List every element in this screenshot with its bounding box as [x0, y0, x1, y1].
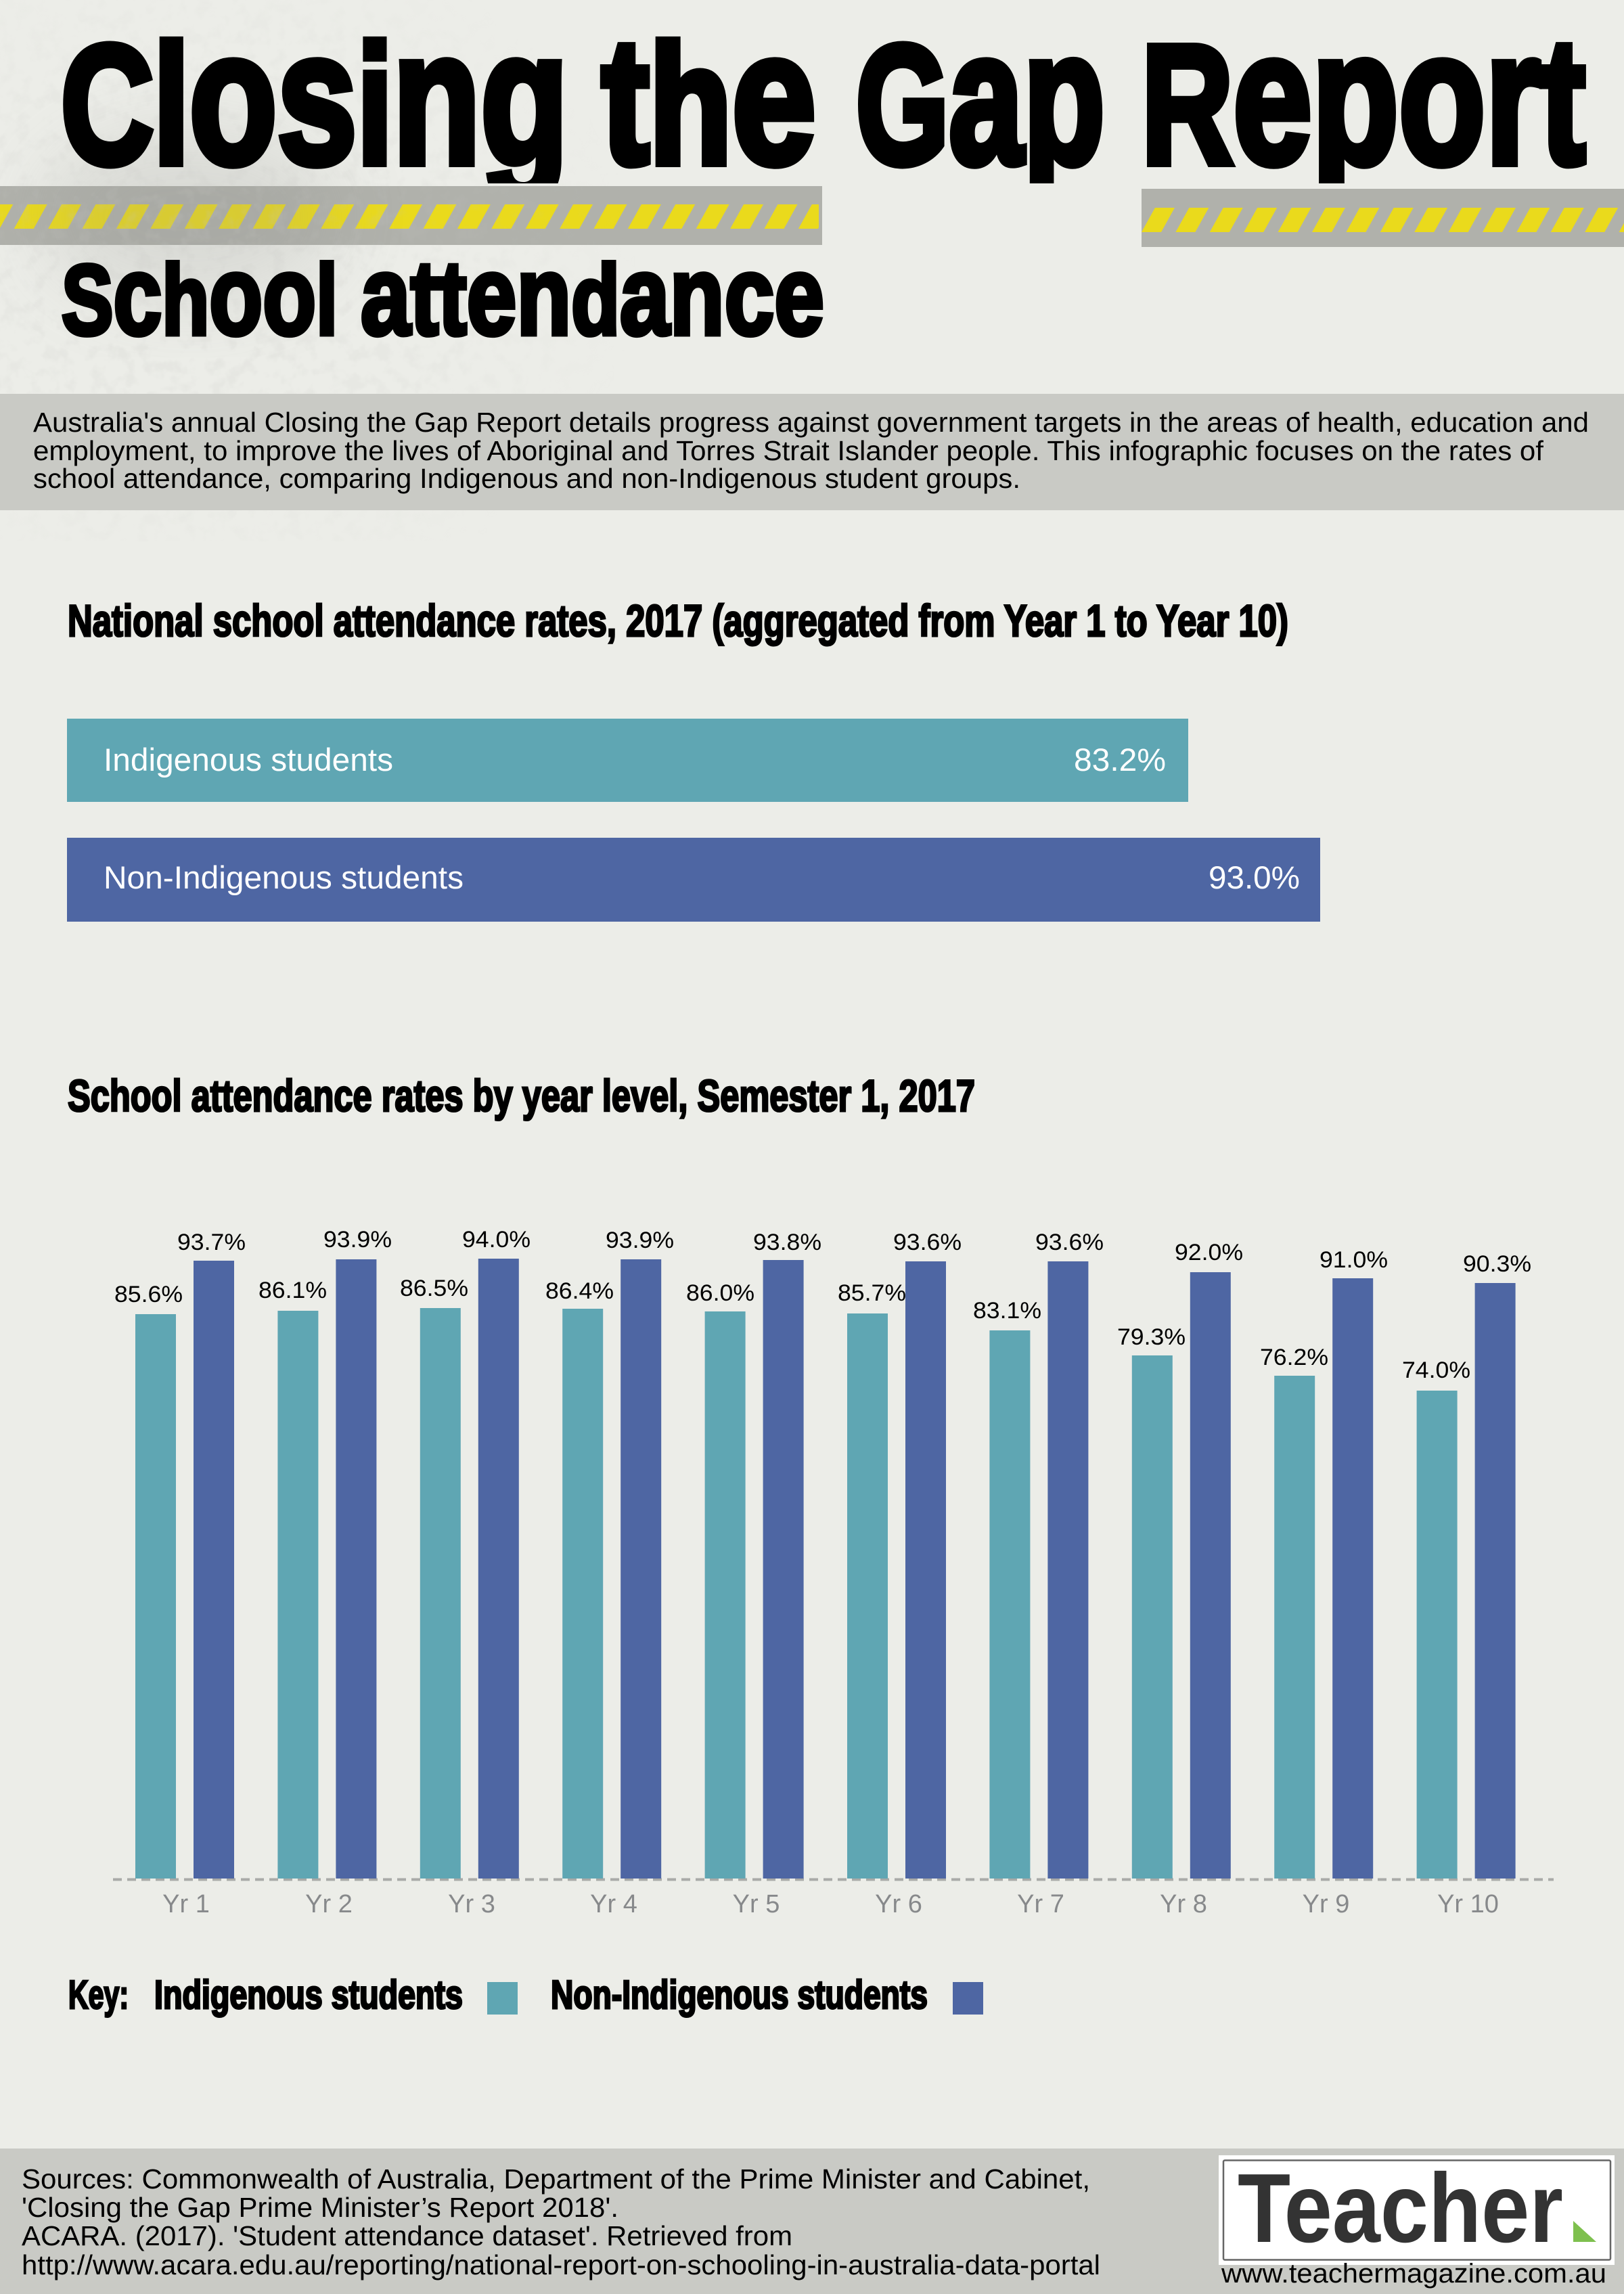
Yr 4 bars: 86.4% — [545, 1278, 614, 1304]
hazard tape band right — [1142, 189, 1624, 247]
Yr 1 bars: 93.7% — [177, 1230, 246, 1255]
Yr 1 bars: 85.6% — [114, 1282, 183, 1307]
Yr 10 bars: Yr 10 — [1437, 1890, 1499, 1918]
Yr 7 bars: Yr 7 — [1017, 1890, 1064, 1918]
sources text: Sources: Commonwealth of Australia, Department of the Prime Minister and Cabinet, — [22, 2163, 1090, 2195]
website url: www.teachermagazine.com.au — [1221, 2259, 1606, 2289]
sources text: 'Closing the Gap Prime Minister’s Report 2018'. — [22, 2192, 618, 2223]
panel: introduction: Australia's annual Closing the Gap Report details progress against government targets in the areas of health, education and — [33, 407, 1589, 438]
Yr 9 bars: 76.2% — [1260, 1345, 1328, 1370]
panel: introduction — [0, 394, 1624, 510]
logo: Teacher: Teacher — [1238, 2153, 1563, 2263]
Yr 1 bars — [114, 1230, 246, 1918]
hazard tape band left — [0, 186, 822, 245]
Yr 7 bars — [973, 1230, 1104, 1918]
legend — [68, 1973, 983, 2017]
heading: national attendance rates: National school attendance rates, 2017 (aggregated from Year 1 to Year 10) — [68, 595, 1288, 646]
Yr 4 bars: Yr 4 — [590, 1890, 637, 1918]
subtitle: attendance — [361, 233, 824, 359]
sources text: ACARA. (2017). 'Student attendance dataset'. Retrieved from — [22, 2220, 792, 2251]
Yr 3 bars: 94.0% — [462, 1227, 531, 1253]
panel: national rates bar chart — [67, 719, 1320, 922]
Yr 10 bars: 74.0% — [1402, 1357, 1470, 1383]
grunge texture top left — [0, 106, 540, 348]
panel: introduction: school attendance, comparing Indigenous and non-Indigenous student groups. — [33, 463, 1020, 494]
Yr 2 bars: 93.9% — [323, 1227, 392, 1253]
Yr 5 bars: 86.0% — [686, 1280, 754, 1306]
subtitle — [62, 233, 824, 359]
panel: introduction: employment, to improve the lives of Aboriginal and Torres Strait Islander people. This infographic focuses on the rates of — [33, 435, 1544, 466]
Yr 6 bars: 93.6% — [893, 1230, 962, 1255]
Yr 9 bars: Yr 9 — [1303, 1890, 1349, 1918]
Yr 7 bars: 83.1% — [973, 1298, 1041, 1324]
Yr 8 bars: 79.3% — [1117, 1324, 1186, 1350]
Yr 5 bars — [686, 1230, 821, 1918]
sources text — [22, 2163, 1100, 2280]
sources text: http://www.acara.edu.au/reporting/national-report-on-schooling-in-australia-data-portal — [22, 2249, 1100, 2280]
Yr 5 bars: Yr 5 — [733, 1890, 780, 1918]
Yr 4 bars: 93.9% — [606, 1228, 674, 1253]
Yr 5 bars: 93.8% — [753, 1230, 821, 1255]
Yr 2 bars: 86.1% — [258, 1278, 327, 1303]
bar: Non-Indigenous students: 93.0% — [1209, 859, 1300, 895]
Yr 9 bars — [1260, 1247, 1388, 1918]
Yr 2 bars — [258, 1227, 392, 1918]
bar: Indigenous students: 83.2% — [1074, 742, 1166, 778]
heading: attendance by year level: School attendance rates by year level, Semester 1, 2017 — [68, 1071, 975, 1121]
Yr 4 bars — [545, 1228, 674, 1918]
Yr 9 bars: 91.0% — [1320, 1247, 1388, 1273]
Yr 3 bars — [400, 1227, 531, 1918]
Yr 3 bars: 86.5% — [400, 1276, 468, 1301]
bar: Non-Indigenous students — [67, 838, 1320, 922]
Yr 6 bars: Yr 6 — [875, 1890, 922, 1918]
Yr 6 bars — [838, 1230, 962, 1918]
Yr 8 bars — [1117, 1240, 1243, 1918]
Yr 8 bars: Yr 8 — [1160, 1890, 1207, 1918]
title — [63, 37, 1587, 183]
chart: attendance by year level — [113, 1227, 1554, 1918]
Yr 3 bars: Yr 3 — [448, 1890, 495, 1918]
bar: Indigenous students — [67, 719, 1188, 802]
legend: Indigenous students — [154, 1973, 463, 2017]
panel: footer — [0, 2149, 1624, 2294]
subtitle: School — [62, 233, 338, 359]
bar: Indigenous students: Indigenous students — [104, 742, 393, 778]
Yr 2 bars: Yr 2 — [305, 1890, 353, 1918]
Yr 10 bars: 90.3% — [1463, 1251, 1531, 1277]
bar: Non-Indigenous students: Non-Indigenous students — [104, 859, 464, 895]
Yr 7 bars: 93.6% — [1035, 1230, 1104, 1255]
Yr 8 bars: 92.0% — [1175, 1240, 1243, 1265]
Yr 1 bars: Yr 1 — [162, 1890, 210, 1918]
legend: Key: — [68, 1973, 129, 2017]
Yr 6 bars: 85.7% — [838, 1280, 906, 1306]
legend: Non-Indigenous students — [551, 1973, 928, 2017]
Yr 10 bars — [1402, 1251, 1531, 1918]
